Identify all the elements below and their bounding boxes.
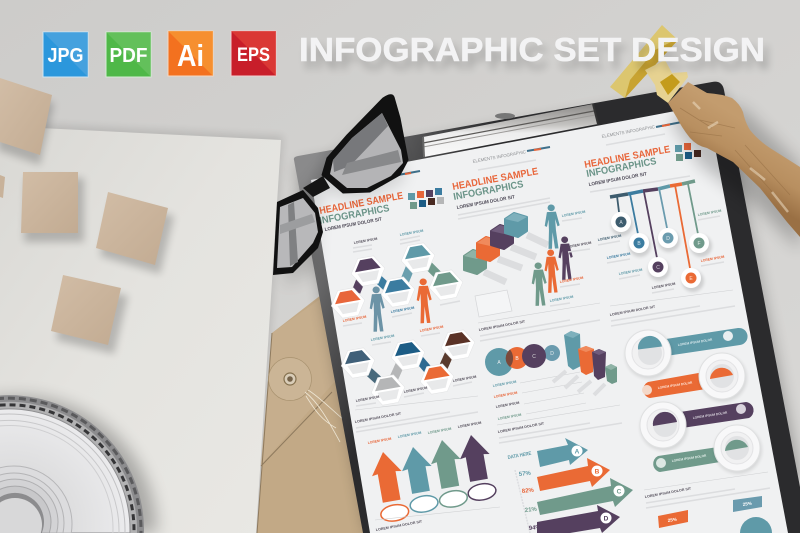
person silhouette orange bbox=[415, 278, 433, 323]
section heading rings: LOREM IPSUM DOLOR SIT bbox=[609, 304, 656, 317]
headline block 3: HEADLINE SAMPLE bbox=[584, 144, 671, 171]
poster header: elements infographic left: ELEMENTS INFOGRAPHIC bbox=[356, 172, 398, 184]
data here stats: 82% bbox=[522, 488, 535, 495]
arrow banner B bbox=[537, 458, 610, 491]
hexagon chart row 1: LOREM IPSUM bbox=[399, 229, 424, 237]
arrow banner C: C bbox=[617, 488, 622, 496]
arrow labels: LOREM IPSUM bbox=[427, 427, 452, 435]
format badge EPS: EPS bbox=[237, 45, 270, 66]
middle column header: ELEMENTS INFOGRAPHIC bbox=[472, 149, 527, 164]
percentage box blue bbox=[733, 496, 762, 512]
format badge JPG: JPG bbox=[48, 45, 84, 67]
pendant labels bbox=[597, 209, 725, 293]
arrow labels: LOREM IPSUM bbox=[367, 437, 392, 445]
percentage box blue: 25% bbox=[742, 501, 752, 507]
overlapping circles A B C D: B bbox=[515, 356, 519, 362]
title shadow: INFOGRAPHIC SET DESIGN bbox=[304, 40, 770, 77]
paper sheet on desk bbox=[0, 122, 283, 533]
headline block 1 bbox=[319, 191, 404, 233]
section heading circles bbox=[478, 303, 600, 341]
labels middle bbox=[549, 210, 592, 306]
bottom section heading left: LOREM IPSUM DOLOR SIT bbox=[375, 519, 423, 532]
pendant timeline bbox=[597, 181, 725, 293]
data here stats: 21% bbox=[525, 507, 538, 514]
arrow banner A bbox=[537, 438, 588, 467]
hexagon chart row 1 bbox=[329, 229, 465, 320]
headline block 2: LOREM IPSUM DOLOR SIT bbox=[456, 194, 515, 211]
stamp rubber head plate bbox=[610, 25, 678, 98]
data here stats: DATA HERE bbox=[507, 451, 533, 461]
stems bbox=[617, 184, 698, 268]
section heading bottom right bbox=[644, 472, 770, 508]
format badge PDF bbox=[106, 32, 151, 77]
overlapping circles A B C D: A bbox=[497, 360, 501, 366]
overlapping circles A B C D: D bbox=[550, 351, 554, 357]
section heading circles: LOREM IPSUM DOLOR SIT bbox=[478, 319, 526, 332]
hexagon chart row 2 bbox=[339, 328, 477, 407]
stamp wooden handle bbox=[668, 82, 800, 237]
node A: A bbox=[619, 220, 623, 226]
right column header bbox=[601, 122, 682, 145]
stamp neck and collar bbox=[645, 60, 688, 103]
arrow banner D bbox=[537, 505, 620, 533]
node F: F bbox=[697, 241, 701, 247]
arrow banner B: B bbox=[595, 468, 600, 476]
headline block 1: HEADLINE SAMPLE bbox=[319, 191, 404, 217]
timeline bar bbox=[610, 181, 695, 197]
format badge Ai: Ai bbox=[177, 38, 204, 73]
stamp gold collar bbox=[660, 74, 680, 95]
right lens reflection bbox=[333, 113, 401, 175]
format badge EPS bbox=[231, 31, 276, 76]
format badge JPG bbox=[43, 32, 88, 77]
right lens glass bbox=[330, 113, 403, 188]
node C: C bbox=[656, 265, 660, 271]
hexagon chart row 2: LOREM IPSUM bbox=[452, 375, 477, 383]
wooden block 2 bbox=[0, 175, 5, 198]
person silhouette orange small bbox=[543, 249, 560, 293]
labels row 1 bbox=[342, 301, 460, 345]
person silhouette blue bbox=[368, 286, 386, 332]
poster contents bbox=[319, 122, 772, 533]
circle legend list: LOREM IPSUM bbox=[497, 413, 522, 421]
arrow banner C bbox=[537, 478, 633, 515]
section heading arrows: LOREM IPSUM DOLOR SIT bbox=[354, 411, 402, 424]
section heading rings bbox=[609, 290, 735, 326]
pendant labels: LOREM IPSUM bbox=[697, 209, 722, 217]
outlined document bbox=[475, 290, 512, 317]
wooden block 4 bbox=[96, 192, 174, 274]
wooden block 5 bbox=[51, 275, 128, 354]
3D box chain bbox=[464, 213, 548, 282]
headline block 2 bbox=[452, 166, 550, 219]
labels row 1: LOREM IPSUM bbox=[390, 306, 415, 314]
node D: D bbox=[666, 236, 670, 242]
clipboard bbox=[294, 82, 800, 533]
data here stats bbox=[507, 451, 542, 533]
node E: E bbox=[689, 276, 693, 282]
left lens frame bbox=[273, 190, 323, 275]
right lens frame bbox=[322, 95, 408, 193]
left lens reflection bbox=[280, 202, 315, 266]
person silhouette teal large bbox=[543, 204, 561, 249]
glasses bbox=[273, 95, 408, 285]
node B: B bbox=[637, 241, 641, 247]
circle legend list: LOREM IPSUM bbox=[495, 401, 520, 409]
headline block 3: LOREM IPSUM DOLOR SIT bbox=[588, 171, 647, 188]
rubber stamp bbox=[610, 25, 800, 250]
stamp plate face bbox=[625, 40, 678, 98]
person silhouette purple bbox=[557, 236, 574, 280]
headline block 2: HEADLINE SAMPLE bbox=[452, 166, 539, 193]
data here stats: 94% bbox=[529, 525, 542, 532]
pendant labels: LOREM IPSUM bbox=[618, 268, 643, 276]
pendant labels: LOREM IPSUM bbox=[651, 282, 676, 290]
circle legend list bbox=[492, 372, 586, 421]
format badge PDF: PDF bbox=[110, 45, 148, 67]
format badge Ai bbox=[168, 31, 213, 76]
paper reel bbox=[0, 395, 157, 533]
colour swatches 1 bbox=[408, 188, 444, 209]
wooden block 1 bbox=[0, 78, 54, 165]
left lens glass bbox=[277, 198, 318, 268]
arrow green bbox=[427, 437, 469, 510]
headline block 1: LOREM IPSUM DOLOR SIT bbox=[324, 216, 382, 233]
hexagon chart row 2: LOREM IPSUM bbox=[355, 395, 380, 403]
hexagon chart row 1: LOREM IPSUM bbox=[353, 237, 378, 245]
ring banner 4: LOREM IPSUM DOLOR bbox=[672, 453, 707, 463]
labels row 1: LOREM IPSUM bbox=[419, 325, 444, 333]
arrow purple bbox=[456, 432, 497, 503]
overlapping circles A B C D bbox=[485, 344, 560, 376]
person silhouette green bbox=[530, 262, 548, 306]
wooden block 3 bbox=[21, 172, 84, 242]
infographic poster sheet bbox=[311, 105, 788, 533]
colour swatches 3 bbox=[675, 143, 701, 161]
section heading bottom right: LOREM IPSUM DOLOR SIT bbox=[644, 486, 692, 499]
title: INFOGRAPHIC SET DESIGN bbox=[299, 32, 765, 69]
ring banner 1 bbox=[625, 328, 748, 379]
circle legend list: LOREM IPSUM bbox=[493, 391, 518, 399]
arrow banner D: D bbox=[604, 516, 609, 522]
pendant labels: LOREM IPSUM bbox=[597, 234, 622, 242]
labels middle: LOREM IPSUM bbox=[561, 210, 586, 218]
arrow chart bbox=[367, 421, 497, 524]
3D bar chart bbox=[553, 331, 617, 395]
ring banner 1: LOREM IPSUM DOLOR bbox=[678, 337, 713, 347]
section heading banners: LOREM IPSUM DOLOR SIT bbox=[497, 421, 545, 434]
labels row 1: LOREM IPSUM bbox=[342, 315, 367, 323]
headline block 1: INFOGRAPHICS bbox=[319, 203, 391, 227]
bottom section heading left bbox=[375, 507, 500, 532]
pendant labels: LOREM IPSUM bbox=[606, 252, 631, 260]
labels middle: LOREM IPSUM bbox=[549, 295, 574, 303]
labels row 1: LOREM IPSUM bbox=[370, 334, 395, 342]
blue circle bottom bbox=[740, 517, 772, 533]
headline block 3: INFOGRAPHICS bbox=[586, 156, 658, 180]
arrow labels bbox=[367, 421, 482, 445]
ring banner 4 bbox=[653, 425, 762, 474]
labels middle: LOREM IPSUM bbox=[567, 241, 592, 249]
overlapping circles A B C D: C bbox=[532, 354, 536, 360]
middle column header bbox=[472, 147, 550, 170]
arrow orange bbox=[368, 449, 410, 524]
right column header: ELEMENTS INFOGRAPHIC bbox=[601, 124, 656, 139]
arrow banner A: A bbox=[575, 448, 580, 456]
clipboard clip bbox=[423, 104, 598, 157]
pendant labels: LOREM IPSUM bbox=[700, 255, 725, 263]
headline block 3 bbox=[584, 144, 690, 192]
wood grain and highlights bbox=[680, 108, 790, 195]
percentage box orange bbox=[658, 510, 688, 528]
arrow labels: LOREM IPSUM bbox=[457, 421, 482, 429]
kraft envelope bbox=[257, 288, 400, 533]
bridge bbox=[303, 176, 330, 197]
headline block 2: INFOGRAPHICS bbox=[453, 179, 525, 203]
labels middle: LOREM IPSUM bbox=[559, 276, 584, 284]
ring banner 2 bbox=[642, 353, 747, 402]
ring banner 3: LOREM IPSUM DOLOR bbox=[693, 410, 728, 420]
circle legend list: LOREM IPSUM bbox=[492, 380, 517, 388]
percentage box orange: 25% bbox=[667, 517, 677, 523]
arrow teal bbox=[398, 444, 439, 515]
ring banner 3 bbox=[640, 402, 754, 451]
section heading banners bbox=[497, 405, 622, 443]
arrow labels: LOREM IPSUM bbox=[397, 431, 422, 439]
data here stats: 57% bbox=[519, 471, 532, 478]
hexagon chart row 2: LOREM IPSUM bbox=[403, 386, 428, 394]
ring banner 2: LOREM IPSUM DOLOR bbox=[658, 380, 693, 390]
section heading arrows bbox=[354, 396, 478, 432]
